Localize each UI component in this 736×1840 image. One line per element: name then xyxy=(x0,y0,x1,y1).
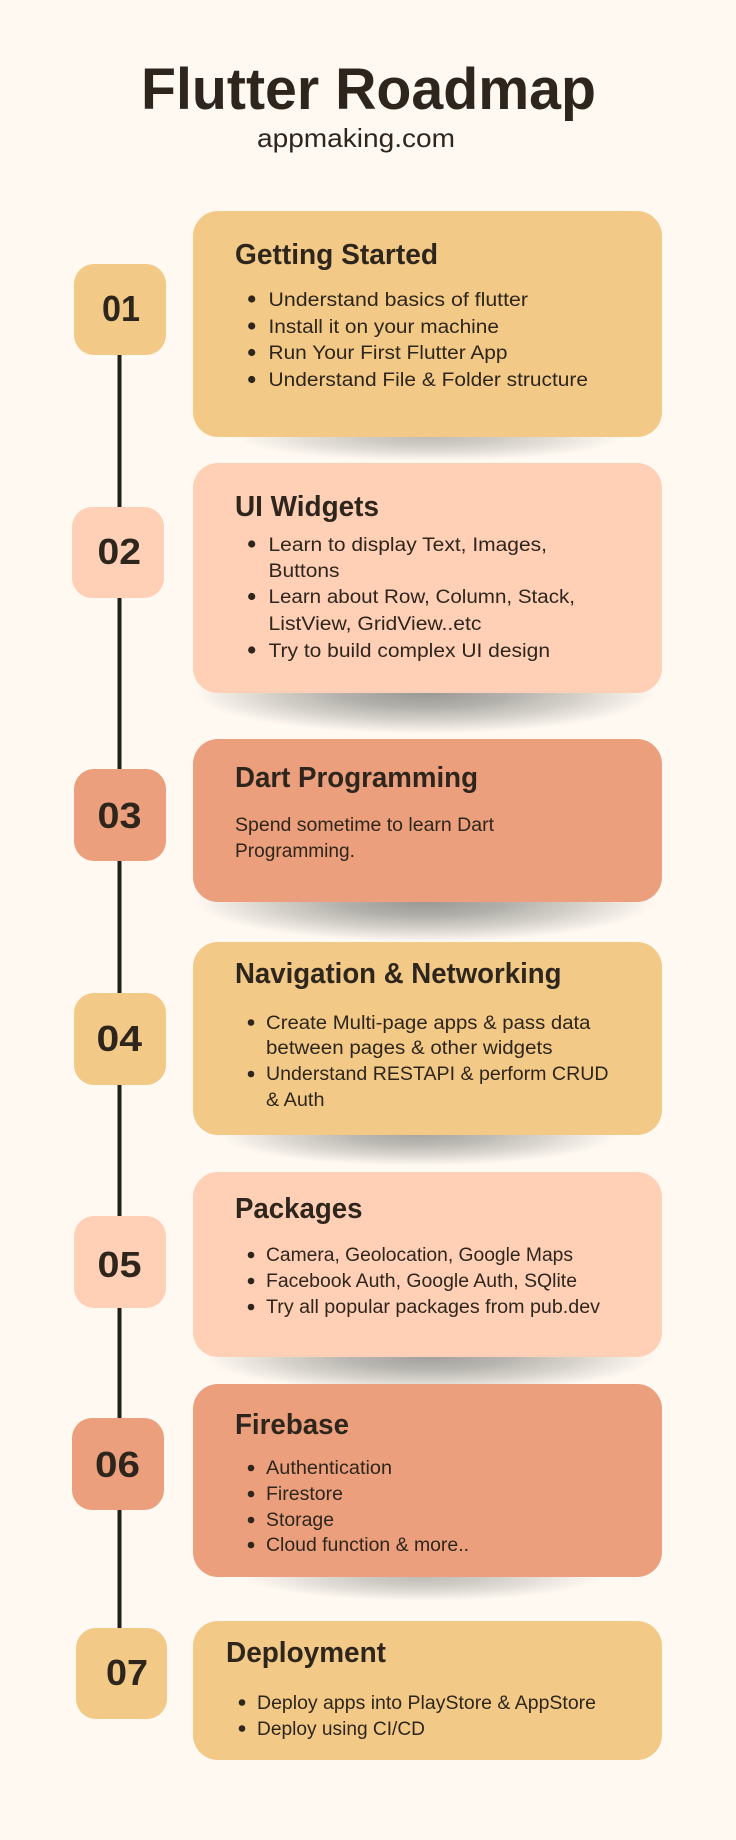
number badge 06: 06 xyxy=(95,1444,140,1485)
number badge 04 xyxy=(74,993,166,1085)
panel: Getting Started: Understand basics of flutter xyxy=(268,290,529,311)
number badge 01 xyxy=(74,264,166,355)
panel: Deployment: Deployment xyxy=(226,1637,386,1669)
panel: UI Widgets: Learn about Row, Column, Stack, xyxy=(268,587,575,608)
panel: Navigation & Networking xyxy=(193,942,662,1135)
panel: Navigation & Networking: Understand RESTAPI & perform CRUD xyxy=(266,1064,608,1085)
panel: Dart Programming: Dart Programming xyxy=(235,762,478,794)
number badge 03 xyxy=(74,769,166,861)
title: Flutter Roadmap xyxy=(141,57,596,122)
panel: UI Widgets: UI Widgets xyxy=(235,491,379,523)
panel: Getting Started: Understand File & Folder structure xyxy=(268,370,588,391)
panel: Deployment: Deploy using CI/CD xyxy=(257,1719,425,1740)
step 07: Deployment xyxy=(76,1621,662,1760)
panel: Firebase: Firestore xyxy=(266,1484,343,1505)
panel: UI Widgets: Try to build complex UI design xyxy=(268,641,550,662)
panel: Navigation & Networking: Create Multi-page apps & pass data xyxy=(266,1013,591,1034)
shadow: card 5 xyxy=(204,1321,656,1393)
panel: Packages: Packages xyxy=(235,1193,362,1225)
shadow: card 3 xyxy=(193,862,657,942)
number badge 01: 01 xyxy=(102,288,140,329)
number badge 07: 07 xyxy=(106,1652,148,1693)
number badge 03: 03 xyxy=(98,795,142,836)
step 02: UI Widgets xyxy=(72,463,662,693)
panel: UI Widgets: ListView, GridView..etc xyxy=(268,614,482,635)
shadow: card 4 xyxy=(218,1104,618,1166)
panel: Firebase: Authentication xyxy=(266,1458,392,1479)
panel: Packages: Facebook Auth, Google Auth, SQlite xyxy=(266,1271,577,1292)
step 03: Dart Programming xyxy=(74,739,662,902)
panel: Getting Started xyxy=(193,211,662,437)
panel: Navigation & Networking: Navigation & Networking xyxy=(235,958,562,990)
panel: Packages xyxy=(193,1172,662,1357)
panel: Dart Programming xyxy=(193,739,662,902)
subtitle: appmaking.com xyxy=(257,123,455,153)
number badge 07 xyxy=(76,1628,167,1719)
number badge 02 xyxy=(72,507,164,598)
timeline line xyxy=(118,350,122,1632)
step 06: Firebase xyxy=(72,1384,662,1577)
step 01: Getting Started xyxy=(74,211,662,437)
panel: Getting Started: Run Your First Flutter App xyxy=(268,343,508,364)
panel: Deployment xyxy=(193,1621,662,1760)
panel: Deployment: Deploy apps into PlayStore & AppStore xyxy=(257,1693,596,1714)
panel: Getting Started: Install it on your machine xyxy=(268,317,499,338)
panel: Dart Programming: Spend sometime to learn Dart xyxy=(235,815,495,836)
number badge 06 xyxy=(72,1418,164,1510)
panel: Firebase: Firebase xyxy=(235,1409,349,1441)
number badge 05 xyxy=(74,1216,166,1308)
panel: Dart Programming: Programming. xyxy=(235,841,355,862)
panel: UI Widgets xyxy=(193,463,662,693)
number badge 04: 04 xyxy=(96,1018,142,1059)
panel: UI Widgets: Buttons xyxy=(268,561,340,582)
shadow: card 1 xyxy=(234,413,626,461)
panel: Packages: Camera, Geolocation, Google Maps xyxy=(266,1245,573,1266)
step 04: Navigation & Networking xyxy=(74,942,662,1135)
number badge 05: 05 xyxy=(98,1244,142,1285)
shadow: card 2 xyxy=(193,652,657,734)
panel: Navigation & Networking: between pages & other widgets xyxy=(266,1038,552,1059)
shadow: card 6 xyxy=(244,1553,600,1601)
panel: Firebase: Storage xyxy=(266,1510,334,1531)
panel: Firebase xyxy=(193,1384,662,1577)
step 05: Packages xyxy=(74,1172,662,1357)
panel: Firebase: Cloud function & more.. xyxy=(266,1535,469,1556)
panel: Getting Started: Getting Started xyxy=(235,239,438,271)
panel: Packages: Try all popular packages from pub.dev xyxy=(266,1297,601,1318)
panel: Navigation & Networking: & Auth xyxy=(266,1090,324,1111)
number badge 02: 02 xyxy=(98,531,141,572)
panel: UI Widgets: Learn to display Text, Images, xyxy=(268,535,547,556)
